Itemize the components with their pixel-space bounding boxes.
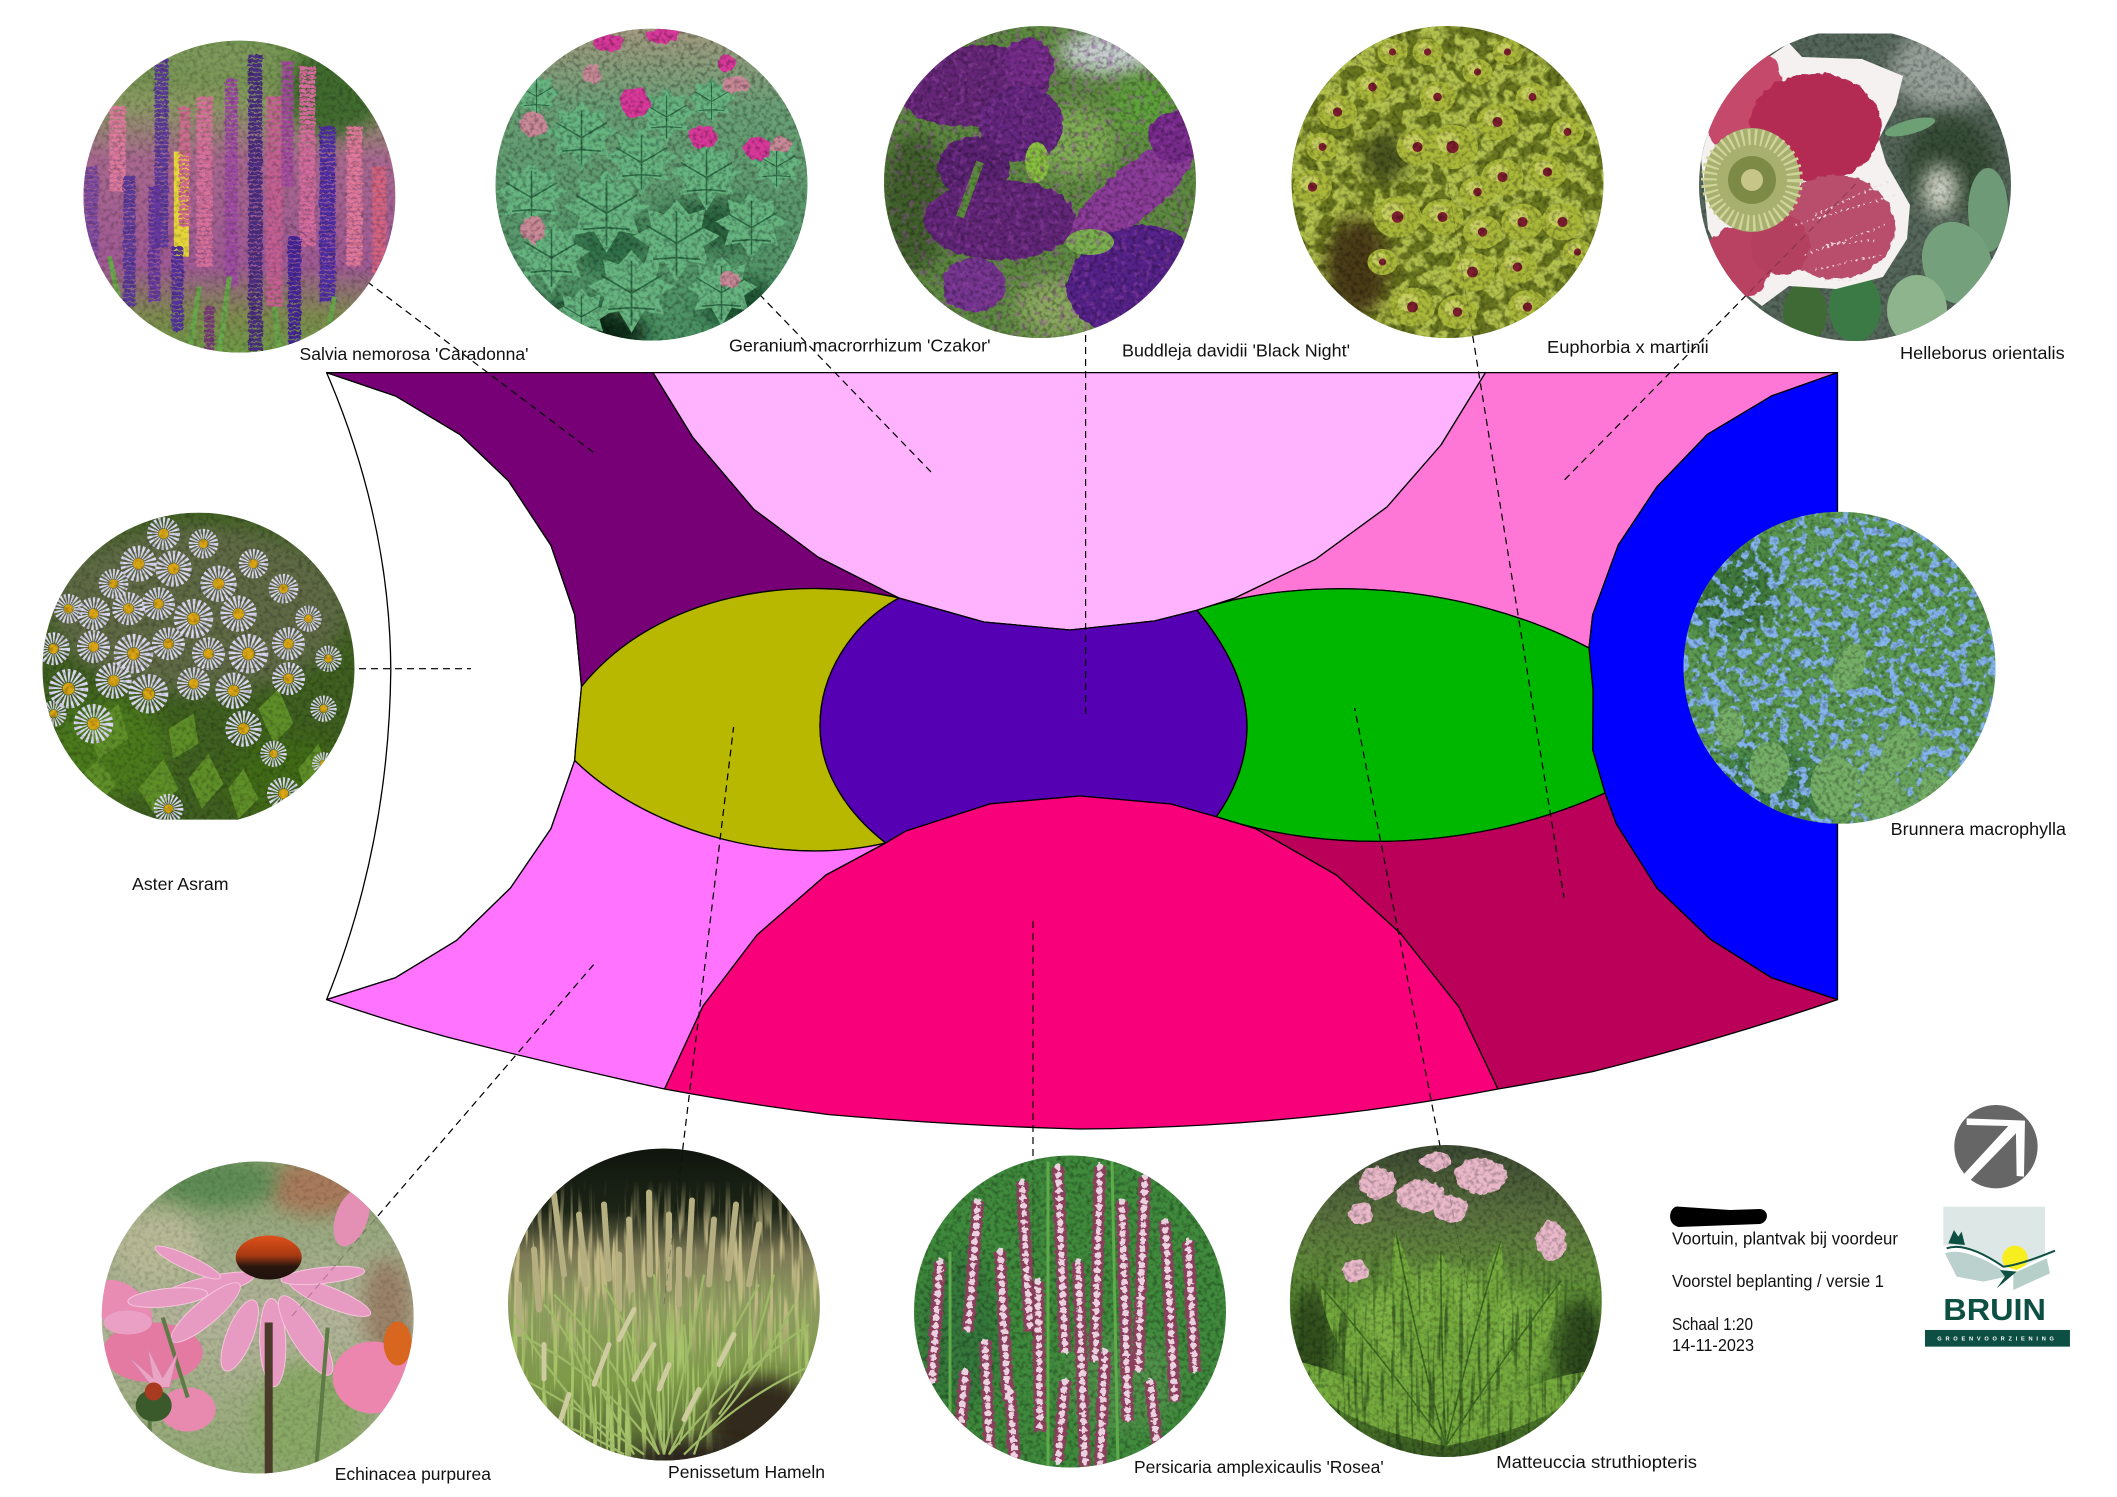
project information: 14-11-2023 xyxy=(1672,1335,1754,1355)
photo: Buddleja davidii xyxy=(880,26,1210,348)
planting plan xyxy=(327,373,1838,1129)
plant labels xyxy=(132,336,2066,1484)
leader lines xyxy=(203,182,1856,1336)
plant labels: Geranium macrorrhizum 'Czakor' xyxy=(729,336,990,356)
redaction mark xyxy=(1670,1207,1767,1227)
project information: Voortuin, plantvak bij voordeur xyxy=(1672,1228,1898,1248)
photo: Geranium macrorrhizum xyxy=(496,28,808,365)
logo: Bruin groenvoorziening: BRUIN xyxy=(1943,1293,2046,1327)
bed: dark purple Salvia xyxy=(327,373,899,687)
project information: Schaal 1:20 xyxy=(1672,1314,1753,1334)
photo: Persicaria amplexicaulis xyxy=(914,1156,1226,1468)
bed: dark magenta Euphorbia xyxy=(1216,793,1838,1089)
plant labels: Helleborus orientalis xyxy=(1900,343,2065,363)
photo: Echinacea purpurea xyxy=(83,1158,414,1474)
photo: Aster Asram xyxy=(42,513,354,825)
bed: violet Buddleja xyxy=(820,598,1247,843)
plant labels: Salvia nemorosa 'Caradonna' xyxy=(300,344,528,364)
bed: magenta Echinacea xyxy=(327,760,886,1089)
logo: Bruin groenvoorziening xyxy=(1925,1207,2070,1347)
photo: Euphorbia x martinii xyxy=(1292,26,1604,338)
project information xyxy=(1672,1228,1898,1355)
bed: pink Helleborus xyxy=(1197,373,1838,648)
bed: olive Penisetum xyxy=(575,589,899,851)
plant labels: Matteuccia struthiopteris xyxy=(1496,1452,1697,1472)
plant labels: Echinacea purpurea xyxy=(335,1464,491,1484)
plant labels: Persicaria amplexicaulis 'Rosea' xyxy=(1134,1457,1384,1477)
icon: north arrow xyxy=(1954,1105,2038,1188)
logo: Bruin groenvoorziening: GROENVOORZIENING xyxy=(1937,1337,2055,1343)
bed: hot pink Matteuccia xyxy=(665,796,1498,1129)
bed: green Persicaria xyxy=(1197,589,1605,841)
photo: Helleborus orientalis xyxy=(1691,29,2011,345)
bed: white Aster crescent xyxy=(327,373,582,1000)
photo: Matteuccia struthiopteris xyxy=(1286,1145,1606,1457)
plant labels: Euphorbia x martinii xyxy=(1547,337,1709,357)
photo: Salvia nemorosa xyxy=(83,37,395,353)
bed: blue Brunnera xyxy=(1589,373,1838,1000)
photo: Penisetum Hameln xyxy=(508,1148,820,1478)
plant labels: Buddleja davidii 'Black Night' xyxy=(1122,340,1350,360)
plant labels: Brunnera macrophylla xyxy=(1891,819,2066,839)
leader lines over photos xyxy=(203,182,1856,1336)
photo: Brunnera macrophylla xyxy=(1680,512,1996,828)
bed: light pink Geranium xyxy=(653,373,1486,630)
plant labels: Penissetum Hameln xyxy=(668,1462,825,1482)
plant labels: Aster Asram xyxy=(132,874,228,894)
project information: Voorstel beplanting / versie 1 xyxy=(1672,1271,1884,1291)
